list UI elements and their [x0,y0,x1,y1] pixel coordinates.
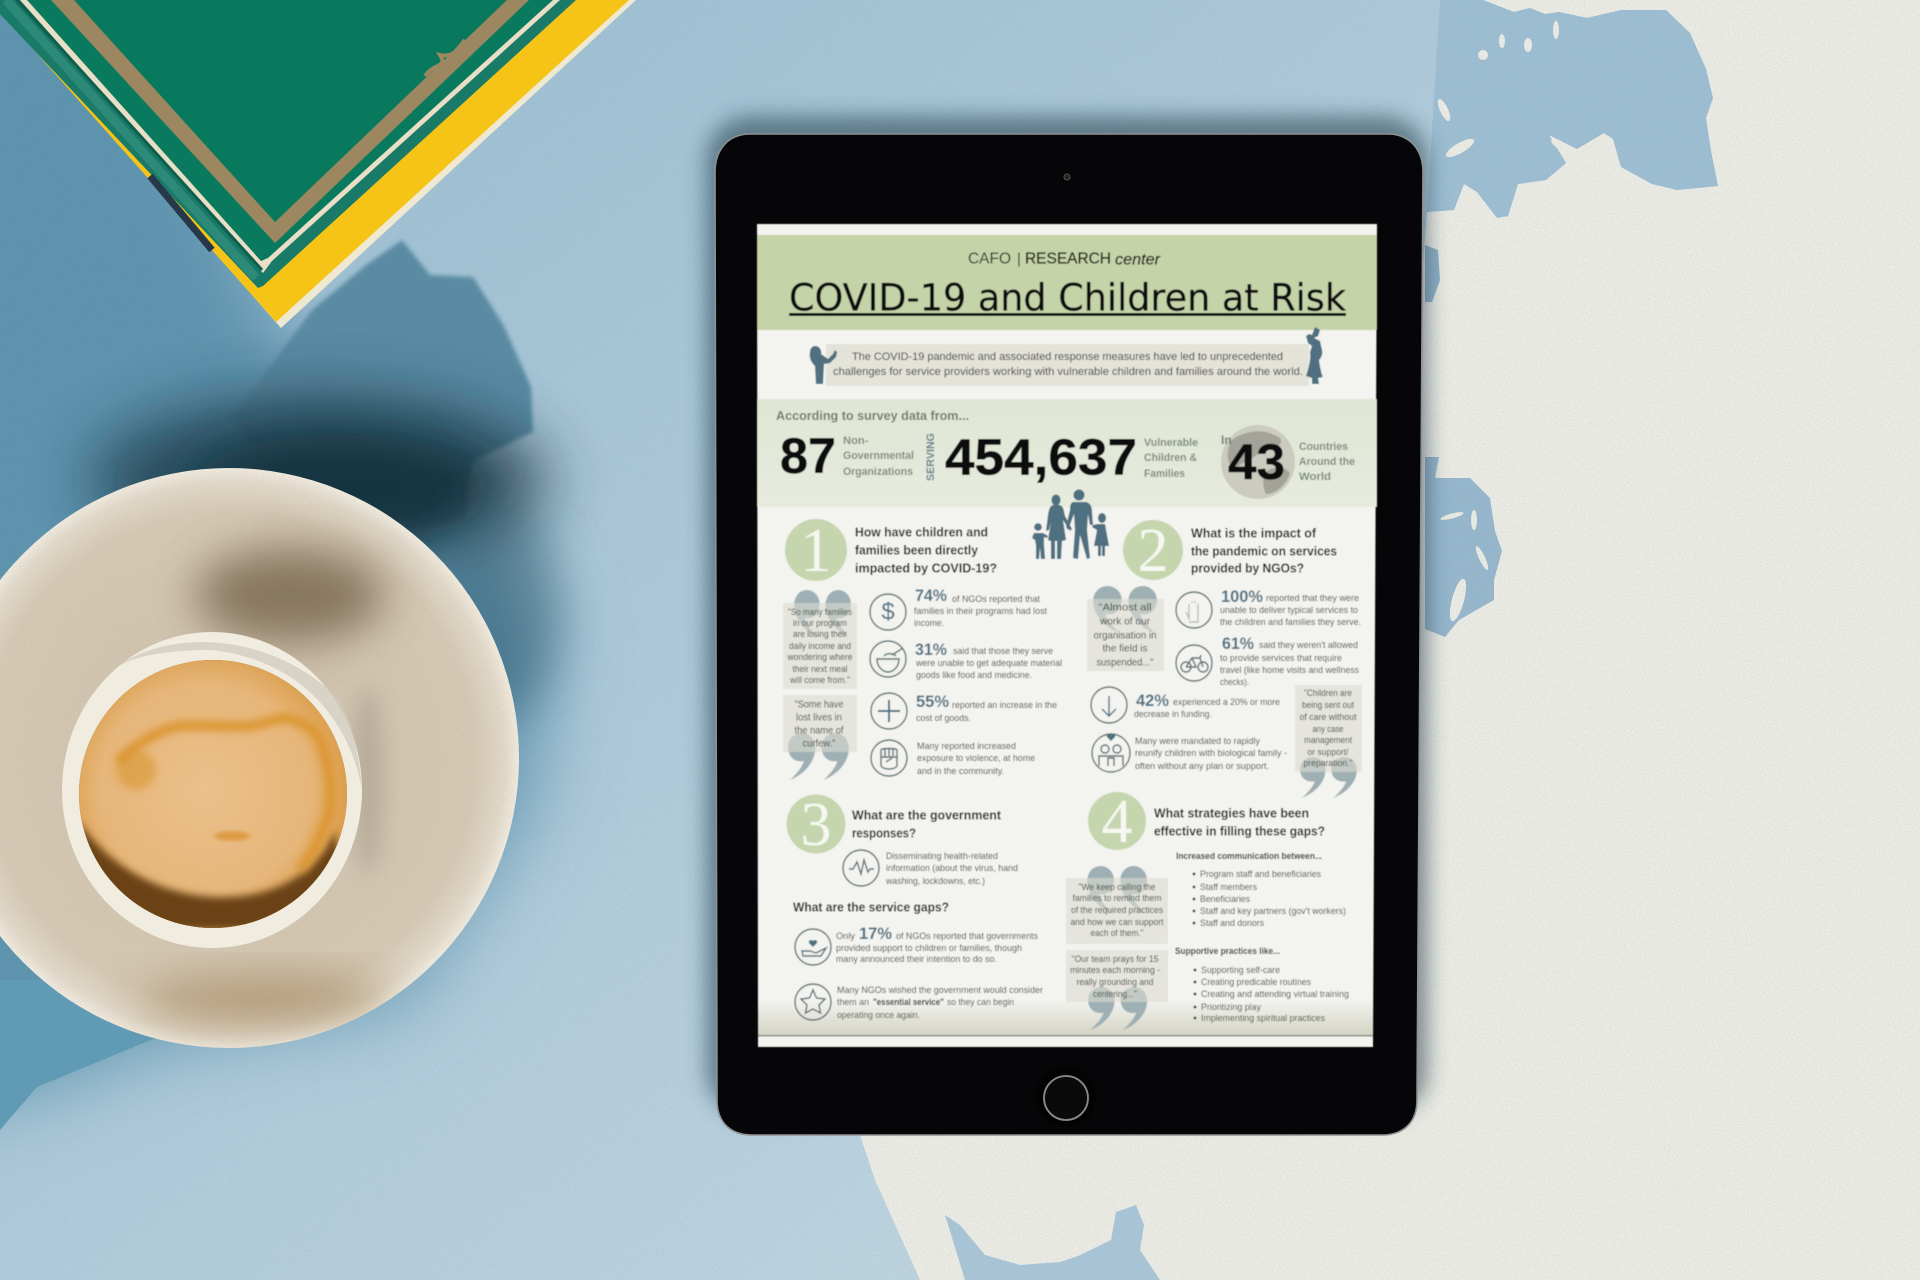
stat: 43 countries: World [1299,471,1331,483]
stat: violence: exposure to violence, at home [917,753,1035,763]
quote: team prays: really grounding and [1076,977,1154,987]
quote: field work suspended: organisation in [1094,630,1157,642]
item: essential service: so they can begin [947,997,1014,1007]
item: essential service: "essential service" [873,997,944,1007]
tablet shadow [706,116,1428,1116]
stat: 43 countries: In [1221,433,1232,447]
quote: sent out of care: being sent out [1302,700,1354,710]
icon: pulse [843,850,879,886]
list: increased communication: Staff and key partners (gov't workers) [1200,906,1346,916]
item: essential service [795,984,1043,1020]
stat: 74% lost income: of NGOs reported that [952,594,1040,604]
book spine stripes [6,0,262,278]
stat: 55% cost of goods: 55% [916,693,949,711]
icon: boy silhouette [810,346,837,384]
stat: 17% government support: many announced their intention to do so. [836,954,997,964]
stat: 61% travel: 61% [1222,635,1254,653]
subheading: service gaps: What are the service gaps? [793,900,949,914]
quote: calling families [1066,866,1168,944]
stat: 31% material goods [870,641,1062,680]
stat: 100% unable to deliver: 100% [1221,588,1263,606]
quote: lives lost: curfew." [802,738,836,750]
list: supportive practices: Supportive practices like... [1175,946,1280,956]
heading 3 [852,808,1002,840]
item: essential service: them an [837,997,869,1007]
heading 1: families been directly [855,542,979,558]
quote: daily income: "So many families [788,607,852,617]
heading 2: What is the impact of [1191,526,1317,540]
quote: lives lost: the name of [794,726,844,736]
home button [1036,1067,1096,1127]
stat: 31% material goods: were unable to get adequate material [915,658,1062,668]
list: increased communication: Beneficiaries [1200,894,1250,904]
quote: daily income: daily income and [789,641,851,651]
splotch tint upper right [1427,0,1718,218]
stat: reunify: reunify children with biological family - [1135,748,1287,758]
quote: field work suspended: the field is [1102,644,1148,654]
number badge 4: 4 [1102,788,1132,856]
list: supportive practices: Prioritizing play [1201,1002,1261,1012]
title: COVID-19 and Children at Risk [789,276,1347,320]
quote: lives lost: lost lives in [796,712,842,724]
quote: team prays: minutes each morning - [1070,965,1160,975]
tablet [715,134,1423,1135]
item: health information [843,850,1018,886]
stat: 61% travel: checks). [1220,677,1249,687]
stat: 42% funding: 42% [1136,692,1169,710]
stat: 17% government support: of NGOs reported that governments [896,931,1038,941]
stat: 454,637 children: Children & [1144,452,1197,464]
quote: field work suspended: "Almost all [1098,602,1152,614]
icon: woman lifting child silhouette [1306,327,1323,384]
list: supportive practices [1175,946,1349,1023]
splotch lower right [1425,457,1502,637]
panel: survey statistics [757,399,1377,507]
stat: 55% cost of goods [871,693,1057,729]
quote: team prays [1066,950,1168,1030]
quote: daily income: will come from." [789,675,850,685]
list: supportive practices: Creating predicable routines [1201,977,1311,987]
stats heading: According to survey data from... [776,409,969,423]
stat: 61% travel: said they weren't allowed [1259,640,1358,650]
quote: sent out of care [1295,685,1362,798]
stat: 55% cost of goods: cost of goods. [916,713,971,723]
stat: 87 NGOs: Governmental [843,450,914,462]
stat: 31% material goods: goods like food and medicine. [916,670,1032,680]
label: serving: SERVING [925,433,937,481]
quote: field work suspended: work of our [1099,616,1151,628]
heading 1 [855,524,997,576]
icon: family reunification [1092,734,1130,772]
quote: lives lost [783,695,857,780]
stat: 42% funding: experienced a 20% or more [1173,697,1280,707]
stat: 61% travel: travel (like home visits and wellness [1220,665,1359,675]
logo: CAFO research center [968,250,1161,268]
stat: 43 countries: Countries [1299,441,1348,453]
quote: sent out of care: management [1304,735,1352,745]
quote: daily income: their next meal [792,664,848,674]
stat: 43 countries [1221,425,1355,499]
coffee saucer [0,460,530,1060]
icon: plus [871,693,907,729]
stat: reunify [1092,734,1287,772]
item: essential service: Many NGOs wished the government would consider [837,985,1043,995]
panel: introduction [810,327,1323,386]
icon: raised hand [1176,592,1212,628]
quote: sent out of care: any case [1312,724,1344,734]
stat: 42% funding [1091,687,1280,723]
quote: sent out of care: or support/ [1308,747,1349,757]
stat: 454,637 children: Vulnerable [1144,437,1198,449]
list: supportive practices: Supporting self-care [1201,965,1280,975]
logo: CAFO research center: RESEARCH [1025,250,1111,268]
quote: field work suspended: suspended..." [1096,658,1154,668]
panel: header [757,235,1377,330]
quote: daily income: are losing their [793,629,847,639]
water stain and saucer shadow [90,240,560,720]
coffee cup [62,632,362,948]
quote: calling families: each of them." [1090,928,1144,938]
icon: fist [871,740,907,776]
quote: calling families: families to remind them [1072,893,1162,903]
quote: sent out of care: preparation." [1304,758,1352,768]
stat: 87 NGOs: Organizations [843,466,913,478]
stat: 31% material goods: said that those they serve [953,646,1053,656]
number badge 2 [1123,517,1183,585]
panel: question 3 [786,791,1043,1020]
list: supportive practices: Creating and attending virtual training [1201,989,1349,999]
quote: daily income: wondering where [787,652,852,662]
stat: 61% travel [1176,635,1359,687]
stat: 74% lost income: income. [914,618,944,628]
stat: reunify: often without any plan or support. [1135,761,1269,771]
heading 3: What are the government [852,808,1002,822]
book ornament [425,40,465,76]
stat: 17% government support [795,925,1038,965]
stat: 454,637 children: Families [1144,468,1185,480]
list: increased communication: Staff and donors [1200,918,1264,928]
heading 1: How have children and [855,524,988,540]
panel: question 1 [783,517,1062,780]
stat: 31% material goods: 31% [915,641,947,659]
item: health information: washing, lockdowns, etc.) [885,876,985,886]
heading 4: effective in filling these gaps? [1154,824,1325,838]
quote: calling families: "We keep calling the [1078,882,1156,892]
number badge 1 [785,517,847,585]
stat: 74% lost income: 74% [915,587,947,605]
item: health information: information (about the virus, hand [886,863,1018,873]
stat: 74% lost income [870,587,1047,630]
stat: 100% unable to deliver [1176,588,1361,628]
number badge 3: 3 [800,791,832,859]
number badge 2: 2 [1138,517,1168,585]
stat: violence: Many reported increased [917,741,1016,751]
stat: 17% government support: Only [836,931,855,941]
panel: question 4 [1066,788,1349,1030]
list: increased communication: Program staff and beneficiaries [1200,869,1321,879]
stat: 74% lost income: families in their programs had lost [914,606,1047,616]
icon: family silhouette [1032,490,1109,559]
item: essential service: operating once again. [837,1010,920,1020]
icon: bowl [870,641,906,677]
list: increased communication [1176,851,1346,928]
list: supportive practices: Implementing spiritual practices [1201,1013,1325,1023]
stat: violence [871,740,1035,776]
camera [1064,174,1070,180]
panel: question 2 [1087,517,1362,798]
stat: violence: and in the community. [917,766,1004,776]
quote: team prays: "Our team prays for 15 [1072,954,1158,964]
stat: 454,637 children: 454,637 [945,428,1137,486]
stat: 17% government support: provided support to children or families, though [836,943,1022,953]
logo: CAFO research center: | [1017,250,1021,268]
heading 2: the pandemic on services [1191,544,1337,558]
heading 2 [1191,526,1337,576]
heading 4 [1154,806,1325,838]
stat: 17% government support: 17% [859,925,892,943]
icon: dollar [870,594,906,630]
stat: 87 NGOs: 87 [780,428,836,484]
stat: 100% unable to deliver: unable to deliver typical services to [1220,605,1358,615]
icon: hand with heart [795,929,831,965]
stat: 100% unable to deliver: reported that they were [1266,593,1359,603]
logo: CAFO research center: CAFO [968,250,1011,268]
intro text: challenges for service providers working with vulnerable children and families around the world. [833,366,1303,378]
heading 4: What strategies have been [1154,806,1309,820]
icon: down arrow [1091,687,1127,723]
number badge 4 [1088,788,1146,856]
logo: CAFO research center: center [1115,252,1161,268]
icon: globe [1221,425,1295,499]
quote: lives lost: "Some have [794,700,844,710]
list: increased communication: Staff members [1200,882,1257,892]
item: health information: Disseminating health-related [886,851,998,861]
tablet screen infographic [757,224,1377,1047]
intro text: The COVID-19 pandemic and associated response measures have led to unprecedented [852,351,1283,363]
icon: dollar: $ [881,598,895,626]
quote: daily income: in our program [793,618,847,628]
stat: 42% funding: decrease in funding. [1134,709,1212,719]
quote: calling families: and how we can support [1070,917,1164,927]
intro text [833,351,1303,378]
screen background [757,224,1377,1047]
quote: field work suspended [1087,586,1164,671]
icon: bicycle [1176,645,1212,681]
book corner [0,0,636,328]
stat: 87 NGOs: Non- [843,435,869,447]
heading 1: impacted by COVID-19? [855,560,997,576]
quote: daily income [783,590,857,689]
quote: sent out of care: of care without [1300,712,1357,722]
screen bottom fade [758,1000,1373,1036]
list: increased communication: Increased communication between... [1176,851,1322,861]
stat: reunify: Many were mandated to rapidly [1135,736,1260,746]
stat: 43 countries: Around the [1299,456,1355,468]
stat: 55% cost of goods: reported an increase in the [952,700,1057,710]
heading 3: responses? [852,826,916,840]
icon: star [795,984,831,1020]
quote: team prays: centering..." [1093,989,1137,999]
stat: 87 NGOs [780,428,914,484]
quote: calling families: of the required practices [1071,905,1163,915]
number badge 1: 1 [800,517,832,585]
stat: 61% travel: to provide services that require [1220,653,1342,663]
stat: 100% unable to deliver: the children and families they serve. [1220,617,1361,627]
number badge 3 [786,791,846,859]
stat: 43 countries: 43 [1228,434,1285,490]
quote: sent out of care: "Children are [1304,688,1352,698]
heading 2: provided by NGOs? [1191,560,1304,576]
